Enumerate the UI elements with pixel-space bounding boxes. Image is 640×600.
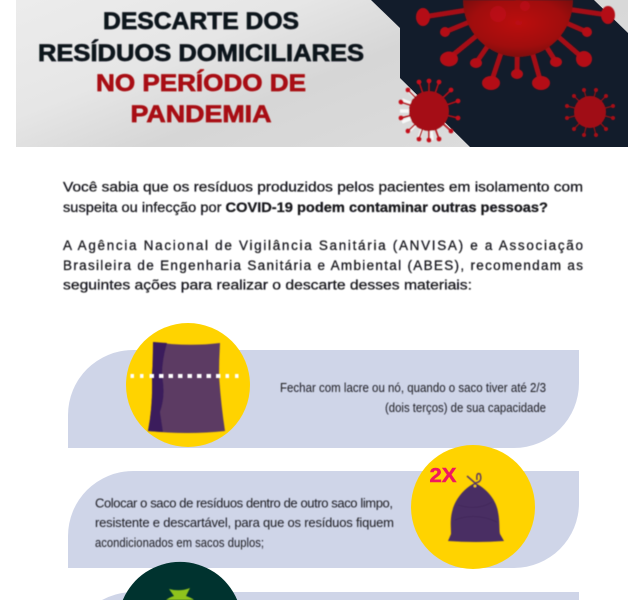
step 3 dark green circle: [123, 562, 237, 600]
step 1 text: [280, 380, 546, 415]
panel: step 2: [68, 445, 579, 569]
title line 4: PANDEMIA: [130, 101, 272, 128]
intro paragraph 1: [63, 180, 583, 215]
title line 3: NO PERÍODO DE: [96, 69, 306, 97]
panel: step 3: [102, 562, 579, 600]
title: [38, 8, 364, 128]
icon: small virus right: [565, 88, 615, 137]
icon: dotted fill line: [130, 374, 238, 378]
step 2 band: [68, 471, 579, 568]
step 3 band: [102, 592, 579, 600]
step 2 text: Colocar o saco de resíduos dentro de outro saco limpo,: [95, 496, 393, 510]
panel: step 1: [68, 323, 579, 448]
intro paragraph 2: A Agência Nacional de Vigilância Sanitária (ANVISA) e a Associação: [63, 238, 583, 253]
icon: large virus: [416, 0, 615, 90]
step 1 text: (dois terços) de sua capacidade: [385, 400, 546, 415]
header banner: [16, 0, 628, 147]
title line 1: DESCARTE DOS: [103, 8, 299, 35]
intro paragraph 2: [63, 238, 583, 292]
title line 2: RESÍDUOS DOMICILIARES: [38, 39, 364, 67]
header grey background: [16, 0, 628, 147]
step 2 yellow circle: [411, 445, 535, 569]
step 1 text: Fechar com lacre ou nó, quando o saco tiver até 2/3: [280, 380, 546, 395]
step 1 yellow circle: [126, 323, 250, 447]
icon: tied bag: [448, 474, 504, 542]
step 2 text: acondicionados em sacos duplos;: [95, 535, 264, 550]
intro paragraph 2: seguintes ações para realizar o descarte desses materiais:: [63, 278, 472, 292]
step 1 band: [68, 350, 579, 448]
intro paragraph 2: Brasileira de Engenharia Sanitária e Ambiental (ABES), recomendam as: [63, 258, 583, 273]
step 2 text: [95, 496, 394, 550]
icon: green bag: [166, 588, 194, 600]
label: 2X: 2X: [430, 465, 457, 487]
icon: closed bag: [148, 342, 225, 433]
icon: small virus left: [399, 79, 460, 142]
intro paragraph 1: suspeita ou infecção por COVID-19 podem contaminar outras pessoas?: [63, 200, 548, 215]
step 2 text: resistente e descartável, para que os resíduos fiquem: [95, 515, 394, 530]
header dark panel: [371, 0, 628, 147]
intro paragraph 1: Você sabia que os resíduos produzidos pelos pacientes em isolamento com: [63, 180, 583, 194]
